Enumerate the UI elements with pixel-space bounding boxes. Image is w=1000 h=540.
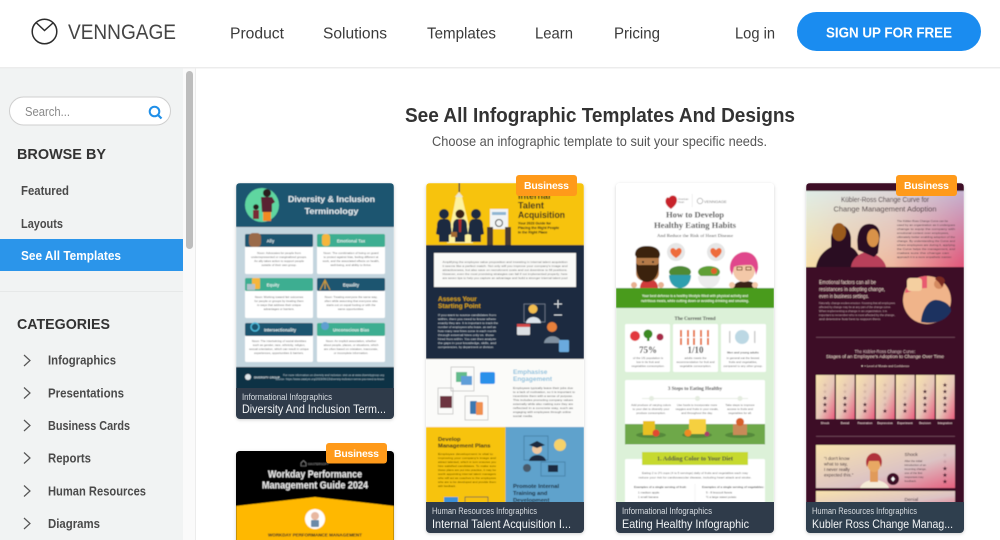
heading: browse by: BROWSE BY — [17, 146, 106, 163]
term tiles: sexual orientation, which can result in unique — [249, 347, 309, 351]
panel: shock: feedback. — [904, 479, 917, 483]
three steps panel: Add produce of varying colors — [631, 403, 671, 407]
stage star chart: Shock — [821, 421, 830, 425]
search box — [10, 97, 170, 125]
term tiles: Noun: An implicit association, whether — [326, 339, 376, 343]
logos: VENNGAGE — [704, 199, 727, 204]
stage star chart: ★ — [922, 408, 928, 415]
term tiles: well-being, and ability to thrive. — [330, 263, 372, 267]
card: diversity and inclusion: Diversity & Inclusion — [288, 194, 375, 204]
caption bar: Diversity And Inclusion Term... — [242, 402, 386, 416]
stage star chart: ★ — [822, 395, 828, 402]
section: training and development — [513, 436, 566, 504]
panel: shock: what to say, — [824, 462, 848, 466]
section: assess starting point: within, then you need to know where — [438, 317, 496, 321]
stage star chart: ★ — [922, 402, 928, 408]
caption bar: Eating Healthy Infographic — [622, 517, 749, 531]
card: internal talent acquisition: Talent — [518, 200, 544, 210]
subtitle: Choose an infographic template to suit your specific needs. — [432, 133, 767, 149]
sidebar — [0, 68, 196, 540]
icon: venngage logo — [32, 19, 57, 44]
stage star chart: ★ — [922, 388, 928, 396]
stage star chart: ★ — [902, 388, 908, 396]
card: diversity and inclusion: Source: https://www.catalyst.org/2019/06/13/diversity-inclusion-terms-you-need-to-know — [275, 377, 385, 381]
navigation: Pricing — [614, 26, 660, 42]
current trend tiles: fruits and vegetables, — [729, 360, 757, 364]
section: assess starting point: through external hires only vs. those — [438, 333, 494, 337]
caption bar — [616, 502, 774, 533]
caption bar — [426, 502, 584, 533]
emotional factors text: affected by change may be at any part of the change curve. — [819, 305, 891, 309]
section: emphasise engagement: Employees typically leave their jobs due — [513, 386, 573, 390]
section: management plans: worth appointing internal talent managers — [438, 472, 497, 476]
card: eating healthy: And Reduce the Risk of Heart Disease — [657, 233, 733, 238]
three steps panel: Take steps to improve — [725, 403, 755, 407]
term tiles: Unconscious Bias — [333, 328, 370, 332]
current trend tiles: 1/10 — [687, 345, 704, 355]
card: internal talent acquisition: Acquisition — [518, 210, 565, 220]
heading: categories: CATEGORIES — [17, 316, 110, 333]
emotional factors text: resistances in adopting change, — [819, 287, 885, 293]
caption bar: Informational Infographics — [622, 506, 712, 516]
card: diversity and inclusion: For more information on diversity and inclusion, visit us at www.diversitygroup.org — [283, 373, 384, 377]
browse list — [0, 184, 183, 271]
panel: shock: ★ — [942, 466, 948, 472]
stage star chart: ★ — [922, 395, 928, 402]
section: emphasise engagement: reflected in a concrete way, such as — [513, 406, 574, 410]
card: kubler ross: used by an organization as it undergoes — [897, 223, 956, 227]
stage star chart: ★ — [862, 408, 868, 415]
term tiles: experiences, opportunities & barriers. — [254, 351, 304, 355]
panel: denial: Denial — [904, 497, 918, 503]
term tiles: Intersectionality — [264, 328, 297, 332]
emotional factors text: and determine how best to support them. — [819, 317, 881, 321]
stage star chart: ★ — [882, 388, 888, 396]
term tiles: Noun: Advocates for people from — [257, 251, 301, 255]
card: eating healthy — [616, 183, 774, 533]
panel: shock: ★ — [942, 478, 948, 486]
panel: adding colour to your diet: 5 - 8 broccoli florets — [706, 490, 733, 494]
section: management plans — [438, 437, 497, 505]
section: assess starting point: how many new hires come in each month — [438, 329, 496, 333]
panel: shock: I never really — [824, 467, 851, 472]
section: assess starting point: Assess Your — [438, 296, 477, 303]
stage star chart: ★ — [922, 382, 928, 389]
card: kubler ross: Stages of an Employee's Adoption to Change Over Time — [826, 354, 945, 359]
card: kubler ross: approach it in a more empathetic manner. — [897, 255, 952, 259]
wordmark: VENNGAGE — [68, 21, 176, 44]
section: assess starting point — [438, 296, 569, 352]
card: workday performance: MASTERSOFT — [308, 462, 329, 466]
term tiles: about people, places, or situations, which — [324, 343, 379, 347]
panel: adding colour to your diet — [624, 452, 766, 502]
illustration: man — [631, 246, 664, 288]
three steps panel: Use foods to incorporate more — [677, 403, 718, 407]
stage star chart: ★ — [882, 395, 888, 402]
term tiles: Noun: The intertwining of social identities — [252, 339, 307, 343]
section: emphasise engagement: incentivize them with a sense of purpose. — [513, 394, 573, 398]
section: assess starting point: the gaps in your knowledge, skills, and — [438, 341, 496, 345]
browse list: Layouts — [21, 217, 63, 231]
section: training and development: Training and — [513, 491, 548, 497]
stage star chart: ★ — [842, 395, 848, 402]
stage star chart: ★ — [862, 382, 868, 389]
panel: shock: "I don't know — [824, 456, 850, 461]
card: kubler ross: change. By understanding the Curve and — [897, 239, 955, 243]
illustration: bowls and hearts — [667, 243, 725, 288]
term tiles: Noun: The combination of being on guard — [323, 251, 379, 255]
illustration: candidates under spotlight — [436, 183, 484, 243]
stage star chart: Integration — [938, 421, 953, 425]
section: assess starting point: competencies, by department or division. — [438, 345, 494, 349]
card: kubler ross: The Kübler-Ross Change Curve can be — [897, 219, 948, 223]
card: diversity and inclusion: DIVERSITY GROUP — [254, 376, 280, 380]
stage star chart: ★ — [842, 402, 848, 408]
panel: adding colour to your diet: 1 medium apple — [638, 490, 660, 494]
section: emphasise engagement — [438, 367, 575, 420]
stage star chart: ★ — [882, 402, 888, 408]
panel: shock: introduction of an — [904, 463, 926, 467]
term tiles: outside of their own group. — [261, 263, 297, 267]
stage star chart: ★ — [862, 402, 868, 408]
card: kubler ross: change to equip the company with — [897, 227, 956, 231]
navigation: Solutions — [323, 26, 387, 42]
card: kubler ross: the Curve helps the management, and — [897, 247, 956, 251]
section: management plans: Develop — [438, 437, 461, 443]
illustration: two women — [816, 223, 886, 267]
stage star chart: Experiment — [897, 421, 913, 425]
term tiles: same opportunities. — [338, 307, 364, 311]
card: eating healthy: Your best defense is a healthy lifestyle filled with physical activity and — [642, 294, 748, 298]
panel: adding colour to your diet: 1 small banana — [638, 495, 659, 499]
card: diversity and inclusion — [236, 183, 394, 419]
card: kubler ross: where employees are during it, applying — [897, 243, 956, 247]
navigation: Product — [230, 26, 285, 42]
card: kubler ross: Change Management Adoption — [834, 206, 937, 214]
panel: shock — [816, 445, 955, 488]
category list: Diagrams — [48, 517, 100, 531]
card: workday performance — [236, 451, 394, 540]
stage star chart — [816, 375, 954, 425]
panel: adding colour to your diet: Examples of a single serving of fruit: — [634, 485, 687, 489]
panel: shock: one of the first — [904, 471, 922, 475]
stage star chart: ★ — [902, 402, 908, 408]
current trend tiles — [625, 324, 766, 372]
caption bar: Kubler Ross Change Manag... — [812, 517, 953, 531]
badge: business — [896, 175, 957, 196]
term tiles: Equity — [267, 282, 280, 288]
category list: Infographics — [48, 354, 116, 368]
stage star chart: ★ — [862, 395, 868, 402]
term tiles: Noun: Treating everyone the same way, — [325, 295, 378, 299]
section: management plans: improving your company's image and — [438, 456, 497, 460]
caption bar: Human Resources Infographics — [432, 506, 537, 516]
navigation: Templates — [427, 26, 496, 42]
section: emphasise engagement: to a lack of motivation, so it is important to — [513, 390, 575, 394]
stage star chart: ★ — [822, 388, 828, 396]
navigation: Log in — [735, 26, 775, 42]
stage star chart: ★ — [882, 382, 888, 389]
emotional factors text: Emotional factors can all be — [819, 280, 876, 286]
three steps panel: and throughout the day. — [681, 411, 713, 415]
stage star chart: ★ — [942, 388, 948, 396]
card: eating healthy: The Current Trend — [674, 317, 716, 322]
stage star chart: ★ — [902, 408, 908, 415]
category list: Reports — [48, 452, 91, 466]
stage star chart: ★ — [842, 382, 848, 389]
term tiles — [245, 233, 385, 362]
stage star chart: ★ — [842, 408, 848, 415]
button: sign up: SIGN UP FOR FREE — [826, 24, 952, 42]
badge: business: Business — [334, 448, 379, 460]
stage star chart: ★ — [942, 402, 948, 408]
emotional factors text: When implementing a change in an organization, it is — [819, 309, 888, 313]
section: assess starting point: If you want to source candidates from — [438, 313, 497, 317]
three steps panel: 3 Steps to Eating Healthy — [668, 387, 723, 392]
current trend tiles: adults meets the — [684, 356, 707, 360]
logos: Heart — [678, 201, 684, 204]
card: internal talent acquisition — [426, 183, 584, 533]
card: workday performance: Management Guide 2024 — [262, 480, 368, 492]
stage star chart: Frustration — [858, 421, 873, 425]
card: eating healthy: nutritious meals, while cutting down or avoiding drinking and smoking. — [641, 299, 749, 303]
panel: adding colour to your diet: ½ a large sweet potato — [706, 495, 737, 499]
section: management plans: with feedback. — [438, 484, 456, 488]
caption bar: Human Resources Infographics — [812, 506, 917, 516]
caption bar — [236, 388, 394, 419]
card: eating healthy: Healthy Eating Habits — [654, 221, 736, 230]
emotional factors text: even in business settings. — [819, 294, 869, 300]
card: workday performance: WORKDAY PERFORMANCE MANAGEMENT — [268, 532, 362, 538]
intro box — [434, 253, 576, 287]
sidebar scrollbar — [186, 71, 193, 249]
three steps panel: produce consumption. — [636, 411, 666, 415]
term tiles: for people or groups by treating them — [254, 299, 304, 303]
term tiles: starts out on equal footing or with the — [326, 303, 376, 307]
current trend tiles: of the US population is — [633, 356, 664, 360]
caption bar: Internal Talent Acquisition I... — [432, 517, 571, 531]
stage star chart: ★ — [902, 395, 908, 402]
three steps panel: vegetables for all. — [728, 411, 752, 415]
intro box: it seems like a perfect match. Not only will you improve your company's image and — [442, 264, 568, 268]
intro box: However, even the most promising strategies can fail if not implemented properly; here — [442, 272, 568, 276]
card: kubler ross — [806, 183, 964, 533]
panel: shock: ★ — [942, 458, 948, 466]
logos — [665, 194, 727, 209]
section: management plans: these plans are put into practice, it may be — [438, 468, 496, 472]
stage star chart: ★ — [942, 408, 948, 415]
emotional factors text: Naturally, change evokes emotion. Knowing that all employees — [819, 301, 896, 305]
panel: adding colour to your diet: Eating 2 to 2½ cups (4 to 5 servings) daily of fruits and vegetables each may — [642, 471, 749, 475]
logos: American — [678, 198, 689, 201]
panel: shock: After the initial — [904, 459, 923, 463]
card: workday performance: Workday Performance — [268, 470, 362, 480]
term tiles: work, and the associated effects on health, — [323, 259, 380, 263]
current trend tiles: compared to any other group. — [723, 364, 763, 368]
navigation — [230, 26, 775, 42]
term tiles: to protect against bias, feeling different at — [324, 255, 379, 259]
header bar — [0, 0, 1000, 68]
card: internal talent acquisition: Internal — [518, 191, 551, 201]
card: kubler ross: makes sure the change can — [897, 251, 950, 255]
stage star chart: ★ — [862, 388, 868, 396]
card: internal talent acquisition: Placing the Right People — [518, 226, 559, 230]
card: kubler ross: Kübler-Ross Change Curve for — [841, 197, 930, 204]
section: training and development: Development — [513, 498, 549, 504]
badge: business — [326, 443, 387, 464]
stage star chart: ★ — [902, 382, 908, 389]
emotional factors text: important to remember who is most affected by the change, — [819, 313, 895, 317]
section: emphasise engagement: externally while also making sure they are — [513, 402, 573, 406]
three steps panel — [625, 380, 765, 445]
section: management plans: who are to be developed and provide them — [438, 480, 497, 484]
illustration: parent and child — [245, 188, 279, 222]
card: kubler ross: emotional context over employees, — [897, 231, 949, 235]
term tiles: often while assuming that everyone also — [324, 299, 378, 303]
intro box: Amplifying the employee value proposition and investing in internal talent acquisition — [442, 260, 568, 264]
section: emphasise engagement: This includes promoting company values — [513, 398, 574, 402]
card: eating healthy: How to Develop — [666, 210, 725, 220]
badge: business: Business — [904, 180, 949, 192]
panel: shock: ★ — [942, 472, 948, 479]
badge: business — [516, 175, 577, 196]
current trend tiles: vegetables consumption. — [631, 364, 665, 368]
panel: adding colour to your diet: reduce your risk for cardiovascular disease, including heart attack and stroke. — [638, 476, 752, 480]
card: internal talent acquisition: in the Right Place — [518, 230, 547, 234]
card: diversity and inclusion: Terminology — [304, 206, 359, 216]
stage star chart: Decision — [919, 421, 931, 425]
panel: shock: Shock — [904, 452, 918, 458]
section: emphasise engagement: engaging with employees through online — [513, 410, 571, 414]
three steps panel: access to fruits and — [727, 407, 753, 411]
section: assess starting point: exactly they are. It is important to track the — [438, 321, 498, 325]
navigation: Learn — [535, 26, 573, 42]
section: management plans: Management Plans — [438, 444, 491, 450]
panel: denial — [815, 490, 956, 502]
section: management plans: hire satisfied candidates. To make sure — [438, 464, 497, 468]
current trend tiles: 75% — [639, 345, 657, 355]
section: management plans: Employee development is vital to — [438, 452, 494, 456]
emotional factors text — [819, 280, 896, 321]
panel: adding colour to your diet: 1. Adding Color to Your Diet — [657, 456, 734, 462]
browse list: Featured — [21, 184, 69, 198]
badge: business: Business — [524, 180, 569, 192]
caption bar — [806, 502, 964, 533]
term tiles: advantages or barriers. — [264, 307, 295, 311]
title: See All Infographic Templates And Designs — [405, 105, 795, 127]
stage star chart: ★ — [822, 402, 828, 408]
section: training and development: Promote Internal — [513, 484, 559, 490]
section: assess starting point: number of employees who leave, as well as — [438, 325, 496, 329]
term tiles: Equality — [343, 282, 360, 288]
term tiles: Emotional Tax — [337, 238, 366, 244]
stage star chart: ★ — [822, 382, 828, 389]
stage star chart: Depression — [877, 421, 893, 425]
current trend tiles: low in its fruit and — [636, 360, 660, 364]
term tiles: An ally takes action to support people — [254, 259, 304, 263]
section: management plans: who will act as coaches to the employees — [438, 476, 497, 480]
three steps panel: to your diet to diversify your — [633, 407, 669, 411]
caption bar: Informational Infographics — [242, 392, 332, 402]
term tiles: Ally — [267, 238, 275, 244]
panel: adding colour to your diet: Examples of a single serving of vegetables: — [702, 485, 764, 489]
illustration: thinking man — [903, 276, 951, 324]
current trend tiles: vegetable consumption. — [680, 364, 712, 368]
category list: Presentations — [48, 386, 124, 400]
intro box: are seven tips to help you capture an advantage and build a stronger internal talent pool — [442, 276, 568, 280]
category list — [24, 354, 146, 531]
term tiles: are often based on mistaken, inaccurate, — [324, 347, 378, 351]
category list: Human Resources — [48, 484, 146, 498]
section: emphasise engagement: Emphasise — [513, 369, 548, 376]
section: assess starting point: Starting Point — [438, 303, 481, 310]
panel: shock: incoming change, — [904, 467, 927, 471]
illustration: woman — [729, 252, 758, 288]
current trend tiles: Men and young adults — [727, 350, 759, 354]
section: assess starting point: hired from within. You can then analyze — [438, 337, 496, 341]
illustration: resume in hands — [487, 209, 511, 245]
stage star chart: ★ — [942, 395, 948, 402]
section: emphasise engagement: Engagement — [513, 376, 553, 383]
card: kubler ross: The Kübler-Ross Change Curve: — [855, 349, 915, 354]
stage star chart: ★ — [822, 408, 828, 415]
three steps panel: veggies and fruits in your meals, — [675, 407, 719, 411]
card: kubler ross: ★ = Level of Morale and Confidence — [861, 364, 910, 368]
current trend tiles: recommendation for fruit and — [676, 360, 715, 364]
term tiles: Noun: Working toward fair outcomes — [255, 295, 304, 299]
section: management plans: attract talented, which in turn ensures you — [438, 460, 496, 464]
card: kubler ross: ultimately better enabling adoption of the — [897, 235, 955, 239]
search box: Search... — [25, 105, 70, 119]
stage star chart: ★ — [842, 388, 848, 396]
section: emphasise engagement: social media. — [513, 414, 533, 418]
stage star chart: Denial — [841, 421, 849, 425]
term tiles: underrepresented or marginalized groups. — [251, 255, 307, 259]
category list: Business Cards — [48, 419, 130, 433]
panel: shock: expected this." — [824, 472, 854, 478]
term tiles: in ways that address their unique — [257, 303, 301, 307]
term tiles: such as gender, race, ethnicity, religion, — [253, 343, 305, 347]
card: internal talent acquisition: Your 2023 Guide for — [518, 222, 552, 226]
stage star chart: ★ — [882, 408, 888, 415]
browse list: See All Templates — [21, 249, 121, 263]
intro box: attractiveness, but also save on recruitment costs and cut downtime to fill positions. — [442, 268, 568, 272]
panel: shock: responses may — [904, 475, 924, 479]
stage star chart: ★ — [942, 382, 948, 389]
current trend tiles: in general eat the fewest — [727, 356, 760, 360]
icon: profile — [305, 509, 325, 529]
button: sign up — [797, 12, 981, 51]
term tiles: or incomplete information. — [334, 351, 368, 355]
panel: shock: ★ — [942, 452, 948, 459]
